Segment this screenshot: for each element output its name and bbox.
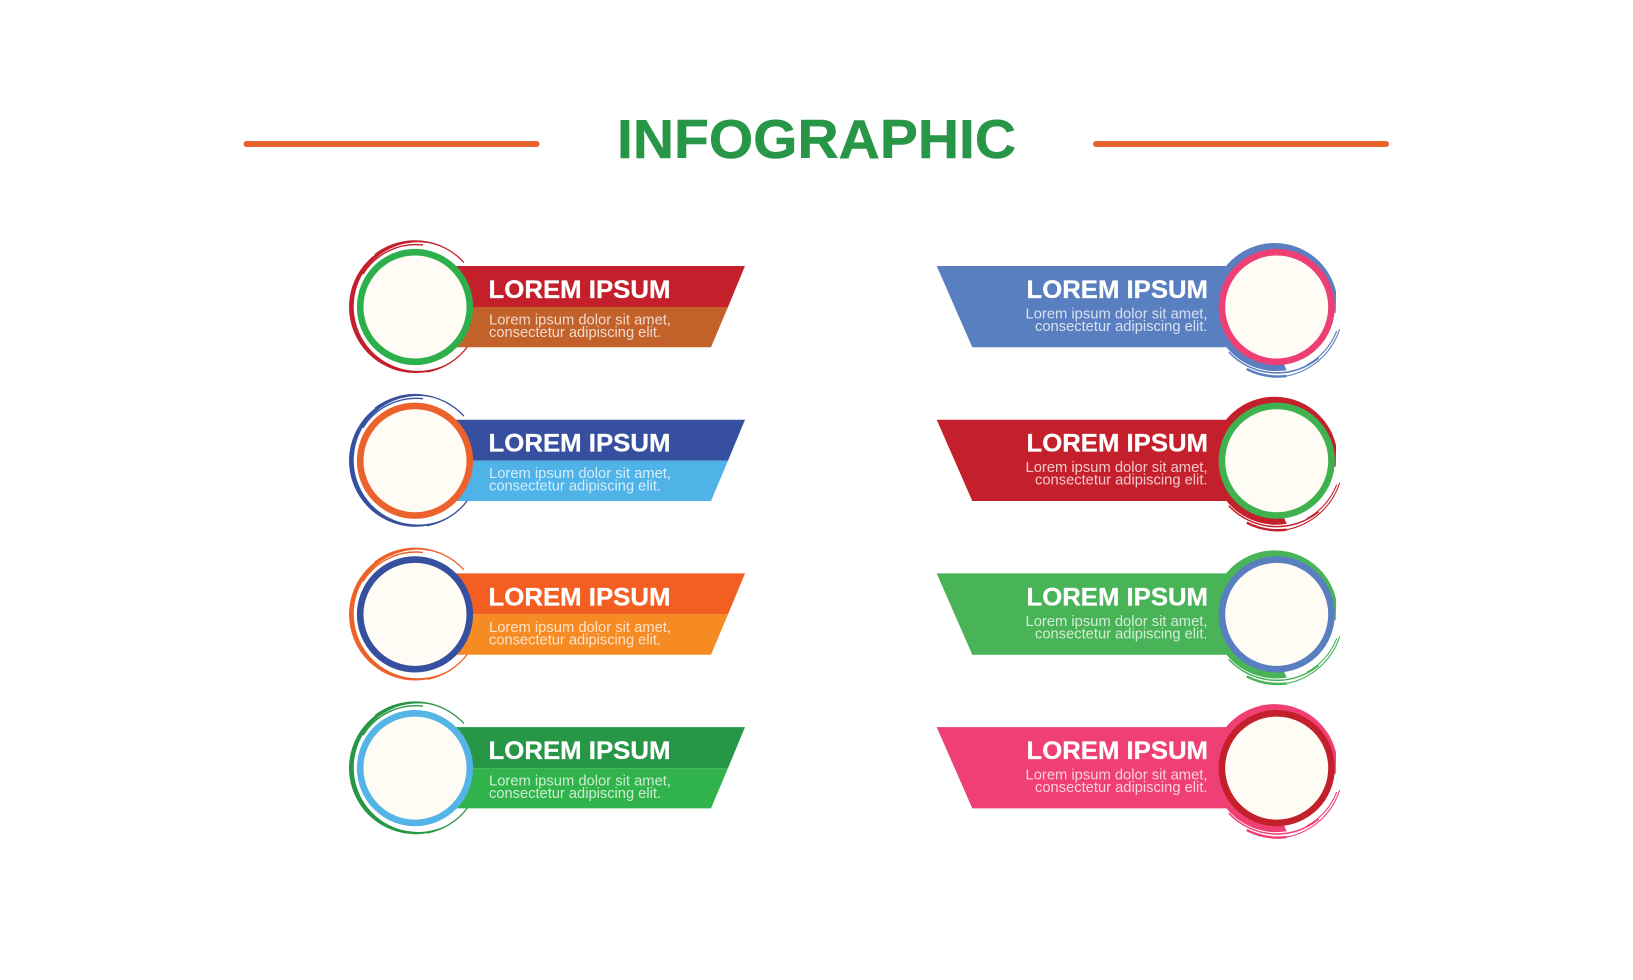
description: Lorem ipsum dolor sit amet,: [489, 465, 671, 482]
panel: left item 2: [349, 395, 745, 527]
brush ring: [1220, 397, 1340, 530]
description: Lorem ipsum dolor sit amet,: [489, 773, 671, 790]
banner: [937, 573, 1240, 655]
description: Lorem ipsum dolor sit amet,: [489, 619, 671, 636]
banner text band: [445, 307, 728, 347]
panel: right item 2: [937, 397, 1340, 530]
panel: left item 1: [349, 241, 745, 373]
description: Lorem ipsum dolor sit amet,: [489, 312, 671, 328]
banner heading band: [445, 573, 745, 614]
brush ring: [349, 395, 468, 527]
panel: right item 4: [937, 704, 1340, 838]
brush ring: [349, 548, 468, 681]
panel: left item 4: [349, 702, 745, 834]
circle badge: [360, 252, 470, 362]
description: Lorem ipsum dolor sit amet,: [1026, 306, 1208, 322]
heading: LOREM IPSUM: [1026, 430, 1208, 458]
left title rule: [244, 141, 540, 147]
heading: LOREM IPSUM: [1026, 276, 1208, 304]
banner text band: [445, 461, 728, 501]
heading: LOREM IPSUM: [1026, 737, 1208, 765]
heading: LOREM IPSUM: [488, 583, 670, 611]
circle badge: [360, 713, 470, 823]
description: consectetur adipiscing elit.: [489, 785, 661, 802]
brush ring: [1220, 243, 1340, 377]
banner: [937, 420, 1240, 501]
title: INFOGRAPHIC: [617, 108, 1016, 170]
banner text band: [445, 614, 728, 655]
brush ring: [349, 702, 468, 834]
brush ring: [1220, 550, 1340, 684]
banner heading band: [445, 266, 745, 307]
description: consectetur adipiscing elit.: [489, 324, 661, 341]
circle badge: [1222, 252, 1331, 362]
heading: LOREM IPSUM: [488, 737, 670, 765]
panel: right item 1: [937, 243, 1340, 377]
circle badge: [1222, 406, 1331, 516]
banner heading band: [445, 420, 745, 461]
description: Lorem ipsum dolor sit amet,: [1026, 459, 1208, 476]
description: consectetur adipiscing elit.: [1035, 625, 1208, 642]
heading: LOREM IPSUM: [488, 276, 670, 304]
circle badge: [1222, 560, 1331, 669]
description: consectetur adipiscing elit.: [489, 631, 661, 648]
panel: left item 3: [349, 548, 745, 681]
description: Lorem ipsum dolor sit amet,: [1026, 613, 1208, 630]
right title rule: [1093, 141, 1389, 147]
heading: LOREM IPSUM: [488, 430, 670, 458]
description: consectetur adipiscing elit.: [1035, 318, 1208, 335]
brush ring: [349, 241, 468, 373]
description: consectetur adipiscing elit.: [489, 478, 661, 495]
banner: [937, 266, 1240, 347]
banner: [937, 727, 1240, 808]
circle badge: [1222, 713, 1331, 823]
banner heading band: [445, 727, 745, 768]
brush ring: [1220, 704, 1340, 838]
description: consectetur adipiscing elit.: [1035, 472, 1208, 489]
circle badge: [360, 560, 470, 669]
banner text band: [445, 768, 728, 808]
description: consectetur adipiscing elit.: [1035, 779, 1208, 796]
panel: right item 3: [937, 550, 1340, 684]
description: Lorem ipsum dolor sit amet,: [1026, 767, 1208, 784]
circle badge: [360, 406, 470, 516]
heading: LOREM IPSUM: [1026, 583, 1208, 611]
